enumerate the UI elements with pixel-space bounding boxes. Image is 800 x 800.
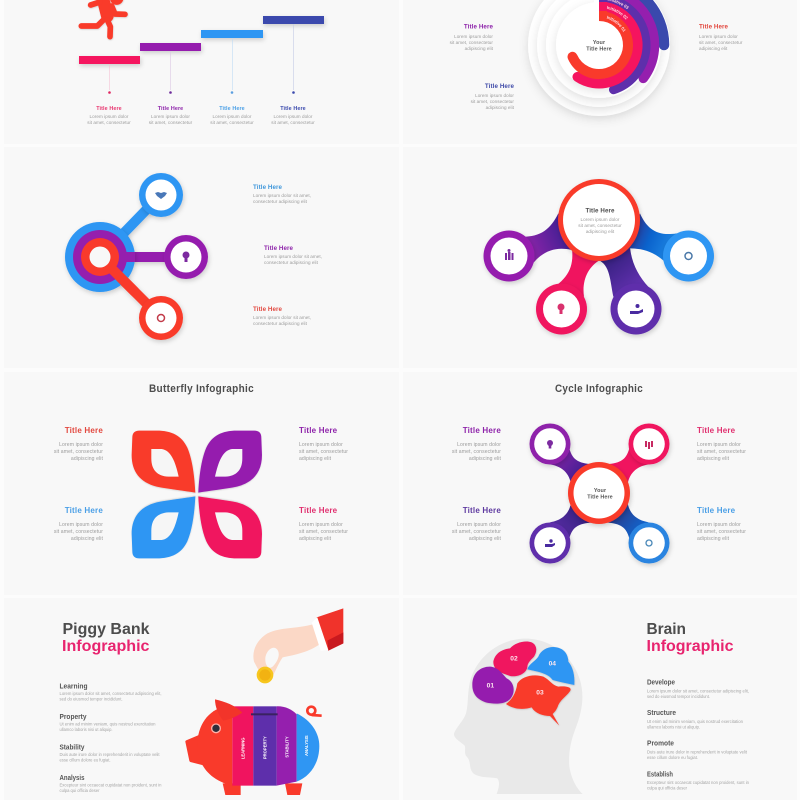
text: upper left [54, 426, 103, 462]
item: Develope [647, 680, 749, 699]
text: lower right: sit amet, consectetur [697, 529, 746, 535]
petal: purple [198, 431, 262, 493]
text: upper right [699, 24, 743, 51]
text: upper left: Lorem ipsum dolor [457, 442, 501, 448]
hub text: Lorem ipsum dolor [581, 217, 620, 222]
gooey connectors [550, 448, 649, 538]
item: Promote [647, 740, 748, 760]
coin slot [251, 713, 278, 715]
butterfly petals [132, 431, 262, 558]
text: third: Lorem ipsum dolor sit amet, [253, 315, 311, 320]
arc labels: Initiative 01 [606, 16, 626, 32]
sleeve shade [327, 632, 343, 651]
step 4 text: Title Here [280, 106, 306, 112]
text: lower left: adipiscing elit [469, 536, 501, 542]
heading: Cycle Infographic [555, 383, 643, 395]
text: upper left: adipiscing elit [465, 46, 494, 51]
segment: analysis: ANALYSIS [304, 735, 309, 756]
segment: property: PROPERTY [262, 736, 267, 759]
arc labels: Initiative 02 [606, 6, 628, 20]
text: lower left [471, 83, 515, 110]
heading: Piggy Bank [62, 621, 150, 638]
text: lower left: sit amet, consectetur [452, 529, 501, 535]
text: upper right: adipiscing elit [697, 456, 730, 462]
square arc starts [594, 0, 607, 21]
hub circle [558, 179, 640, 261]
step 4 text: Lorem ipsum dolor [274, 114, 313, 119]
text: lower right: adipiscing elit [697, 536, 730, 542]
text: lower left: sit amet, consectetur [471, 99, 514, 104]
text: lower right: Lorem ipsum dolor [697, 522, 741, 528]
node: violet money hand [610, 284, 662, 334]
text: third: consectetur adipiscing elit [253, 321, 308, 326]
text: lower left: Lorem ipsum dolor [59, 522, 103, 528]
legs [223, 783, 302, 795]
hub text: sit amet, consectetur [578, 223, 622, 228]
illustration: head with brain [454, 639, 583, 794]
text: upper right: adipiscing elit [699, 46, 728, 51]
hub circle [568, 462, 630, 524]
text: upper right: Lorem ipsum dolor [699, 34, 738, 39]
petal: pink [198, 496, 262, 558]
hub concentric circles [65, 222, 135, 292]
item: Stability: Duis aute irure dolor in reprehenderit in voluptate velit [60, 752, 160, 757]
node: purple bulb [164, 235, 208, 279]
heading: Infographic [646, 638, 734, 655]
text: upper left: Title Here [65, 426, 103, 435]
connector lines [110, 206, 172, 308]
text: first [253, 184, 311, 204]
text: second [264, 245, 322, 265]
hub text [587, 488, 613, 500]
illustration: piggy bank [187, 699, 322, 795]
hub text: Title Here [585, 208, 615, 214]
cuff [312, 617, 328, 651]
item: Stability: Stability [60, 744, 85, 752]
item: Develope: Lorem ipsum dolor sit amet, consectetur adipiscing elit, [647, 688, 749, 694]
text: second: Title Here [264, 245, 294, 252]
item: Property: Property [60, 714, 87, 721]
item: Stability: esse cillum dolore eu fugiat. [60, 758, 110, 762]
text: upper left: Lorem ipsum dolor [59, 442, 103, 448]
step 2 text: sit amet, consectetur [149, 120, 193, 125]
node: pink people [628, 424, 670, 464]
item: Analysis: Analysis [60, 775, 85, 782]
text: upper left: sit amet, consectetur [452, 449, 501, 455]
item: Property [60, 714, 156, 732]
head [197, 706, 232, 786]
stems and dots [108, 24, 295, 94]
item: Structure [647, 710, 744, 730]
step 1 text: Lorem ipsum dolor [90, 114, 129, 119]
panel: radial arcs infographic [450, 0, 743, 122]
text: second: Lorem ipsum dolor sit amet, [264, 254, 322, 259]
heading: Brain [646, 621, 686, 638]
text: upper left [452, 426, 501, 462]
text: lower left: Title Here [463, 506, 501, 515]
lobe 04 [527, 647, 574, 685]
stair bars [79, 16, 324, 64]
item: Establish: Establish [647, 772, 673, 778]
item: Promote: Duis aute irure dolor in reprehenderit in voluptate velit [647, 750, 748, 754]
text: lower right: Title Here [697, 506, 736, 515]
step 1 text: Title Here [96, 106, 122, 112]
hub text: Title Here [587, 494, 613, 500]
text: upper left: adipiscing elit [469, 456, 501, 462]
step 4 text [271, 106, 315, 125]
gooey connectors [518, 213, 677, 297]
text: lower right: sit amet, consectetur [299, 529, 348, 535]
heading [646, 621, 734, 655]
step 1 text: sit amet, consectetur [87, 120, 131, 125]
text: second: consectetur adipiscing elit [264, 260, 319, 265]
item: Stability [60, 744, 160, 762]
item: Establish [647, 772, 750, 790]
node: purple people [484, 230, 534, 282]
icon: running figure [81, 0, 125, 37]
panel: cycle infographic [452, 383, 746, 564]
heading [62, 621, 150, 655]
item: Analysis: Excepteur sint occaecat cupidatat non proident, sunt in [60, 782, 162, 788]
text: third [253, 306, 311, 326]
item: Promote: esse cillum dolore eu fugiat. [647, 755, 698, 760]
text: lower left: Lorem ipsum dolor [475, 93, 514, 98]
step 2 text [149, 106, 193, 125]
lobe 03 [506, 675, 571, 726]
sleeve [317, 608, 343, 651]
item: Develope: Develope [647, 680, 675, 686]
step 3 text: sit amet, consectetur [210, 120, 254, 125]
text: lower left: adipiscing elit [486, 105, 515, 110]
node: purple bulb [530, 424, 570, 464]
petal: blue [132, 496, 195, 558]
text: upper right: sit amet, consectetur [699, 40, 743, 45]
hub text: adipiscing elit [586, 229, 615, 234]
text: upper right: Title Here [699, 24, 729, 30]
radial arcs [572, 0, 664, 90]
item: Promote: Promote [647, 740, 674, 748]
hub text: Your [594, 488, 607, 494]
step 2 text: Lorem ipsum dolor [151, 114, 190, 119]
text: first: Title Here [253, 184, 283, 191]
text: upper left: Title Here [464, 24, 493, 30]
heading: Infographic [62, 638, 150, 655]
item: Learning [60, 684, 162, 702]
item: Establish: culpa qui officia deser [647, 786, 688, 790]
node: pink bulb [536, 284, 587, 334]
step 3 text: Title Here [219, 106, 245, 112]
item: Learning: sed do eiusmod tempor incididunt. [60, 696, 122, 702]
text: upper left: Title Here [463, 426, 501, 435]
panel: stairs infographic [79, 0, 324, 125]
coin [257, 667, 273, 683]
item: Learning: Learning [60, 684, 88, 690]
node: blue phone [663, 230, 714, 282]
lobe numbers: 02 [510, 656, 518, 663]
panel: branching nodes [65, 173, 322, 340]
node: red phone [139, 296, 183, 340]
heading: Butterfly Infographic [149, 383, 254, 395]
text: upper left: sit amet, consectetur [450, 40, 493, 45]
lobe numbers: 01 [487, 682, 494, 689]
petal: red [132, 431, 195, 493]
item: Structure: Structure [647, 710, 676, 717]
text: upper right: Title Here [299, 426, 338, 435]
item: Property: Ut enim ad minim veniam, quis nostrud exercitation [60, 722, 156, 726]
text: third: Title Here [253, 306, 283, 313]
text: lower left: Title Here [65, 506, 103, 515]
text: lower left: Title Here [485, 83, 514, 90]
item: Property: ullamco laboris nisi ut aliquip. [60, 727, 112, 732]
item: Analysis [60, 775, 162, 793]
panel: piggy bank infographic [60, 608, 343, 795]
text: lower right: Lorem ipsum dolor [299, 522, 343, 528]
centre label: Title Here [586, 46, 612, 52]
item: Develope: sed do eiusmod tempor incididunt. [647, 694, 710, 699]
text: lower left: adipiscing elit [71, 536, 103, 542]
lobe numbers: 03 [536, 690, 544, 697]
text: lower right [697, 506, 746, 542]
item: Analysis: culpa qui officia deser [60, 788, 100, 793]
lobe numbers: 04 [549, 661, 556, 668]
node: violet money hand [530, 522, 570, 564]
text: lower left: sit amet, consectetur [54, 529, 103, 535]
item: Learning: Lorem ipsum dolor sit amet, consectetur adipiscing elit, [60, 691, 162, 696]
ear [215, 699, 242, 721]
node: blue handshake [139, 173, 183, 217]
eye [211, 723, 221, 733]
step 2 text: Title Here [158, 106, 183, 112]
step 3 text: Lorem ipsum dolor [213, 114, 252, 119]
lobe numbers [487, 656, 556, 697]
step 4 text: sit amet, consectetur [271, 120, 315, 125]
text: upper right: Lorem ipsum dolor [299, 442, 343, 448]
step 3 text [210, 106, 254, 125]
node: blue phone [628, 522, 670, 564]
text: upper right [697, 426, 746, 462]
panel: central hub with four nodes [484, 179, 714, 334]
text: upper left: adipiscing elit [71, 456, 103, 462]
item: Structure: ullamco laboris nisi ut aliquip. [647, 724, 700, 730]
text: upper right: sit amet, consectetur [299, 449, 348, 455]
step 1 text [87, 106, 131, 125]
text: upper right: sit amet, consectetur [697, 449, 746, 455]
text: upper left: sit amet, consectetur [54, 449, 103, 455]
text: lower left [54, 506, 103, 542]
panel: brain infographic [454, 621, 750, 794]
text: upper right: adipiscing elit [299, 456, 332, 462]
text: upper right [299, 426, 348, 462]
panel: butterfly infographic [54, 383, 348, 558]
item: Structure: Ut enim ad minim veniam, quis nostrud exercitation [647, 719, 744, 724]
centre label [586, 40, 612, 52]
text: upper left [450, 24, 494, 51]
lobe 01 [472, 667, 514, 704]
centre label: Your [593, 40, 606, 46]
text: lower left [452, 506, 501, 542]
text: lower right: Title Here [299, 506, 338, 515]
head silhouette [454, 639, 583, 794]
arc labels [606, 0, 629, 32]
tail [307, 707, 322, 716]
text: upper right: Lorem ipsum dolor [697, 442, 741, 448]
lobe 02 [493, 641, 536, 676]
text: lower right: adipiscing elit [299, 536, 332, 542]
item: Establish: Excepteur sint occaecat cupidatat non proident, sunt in [647, 780, 750, 785]
snout [187, 736, 203, 764]
text: upper left: Lorem ipsum dolor [454, 34, 493, 39]
segment: stability: STABILITY [285, 736, 290, 758]
text: lower right [299, 506, 348, 542]
concentric white discs [528, 0, 670, 116]
hand [253, 624, 320, 680]
text: upper right: Title Here [697, 426, 736, 435]
text: first: consectetur adipiscing elit [253, 199, 308, 204]
text: first: Lorem ipsum dolor sit amet, [253, 193, 311, 198]
illustration: hand and coin [253, 608, 343, 683]
segment: learning: LEARNING [241, 737, 246, 759]
hub text [578, 208, 622, 234]
text: lower left: Lorem ipsum dolor [457, 522, 501, 528]
